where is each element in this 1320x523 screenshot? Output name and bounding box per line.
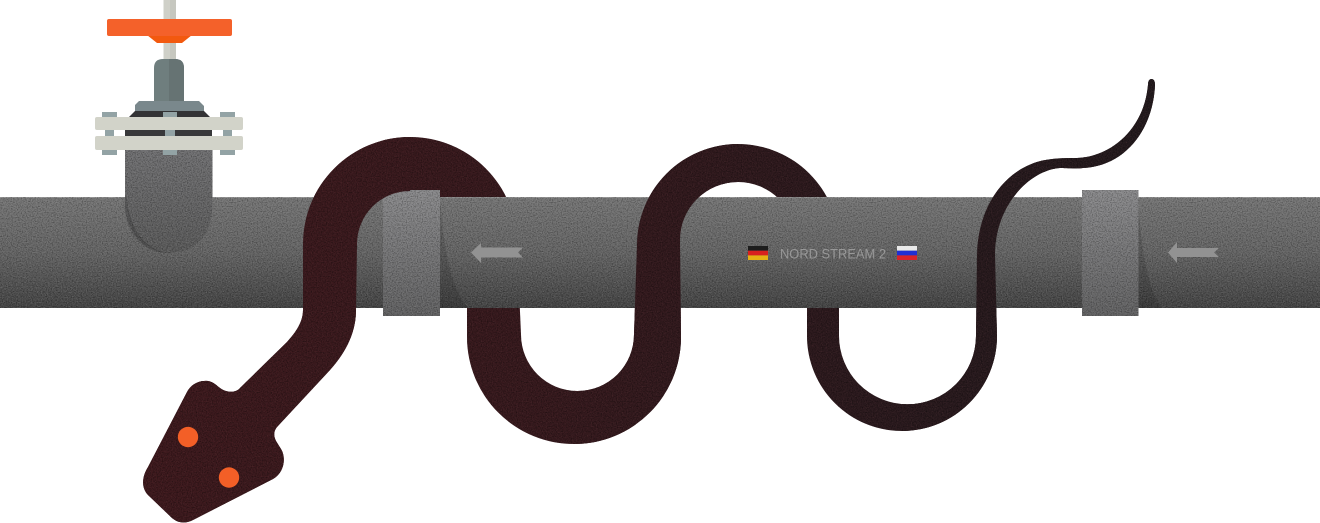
bonnet flange cap [135,101,204,111]
bolts [102,112,235,155]
clamp shadow: right [1138,200,1162,308]
label: Nord Stream 2: NORD STREAM 2 [780,246,886,262]
dark gasket lower [125,130,212,136]
flange plate lower [95,136,243,150]
nozzle shadow edge [125,197,169,253]
clamp: right [1082,190,1138,316]
clamp: left [383,190,440,316]
pipeline [0,197,1320,308]
clamp shadow: left [440,197,468,308]
snake eye: upper [178,427,198,447]
snake: rear coils behind pipe [143,79,1155,522]
valve bonnet [154,59,184,103]
valve assembly [95,0,243,253]
flag: Germany [748,246,768,260]
snake eye: lower [219,467,239,488]
snake: front coils and head over pipe [143,79,1155,522]
center bolt over nozzle [163,150,177,155]
nozzle into pipe [125,150,212,253]
valve stem [164,0,176,62]
flag: Russia [897,246,917,260]
flange plate upper [95,117,243,130]
arrow: flow direction left [471,243,523,263]
valve handle [107,19,232,43]
dark gasket upper [129,111,210,117]
arrow: flow direction right [1168,242,1219,263]
